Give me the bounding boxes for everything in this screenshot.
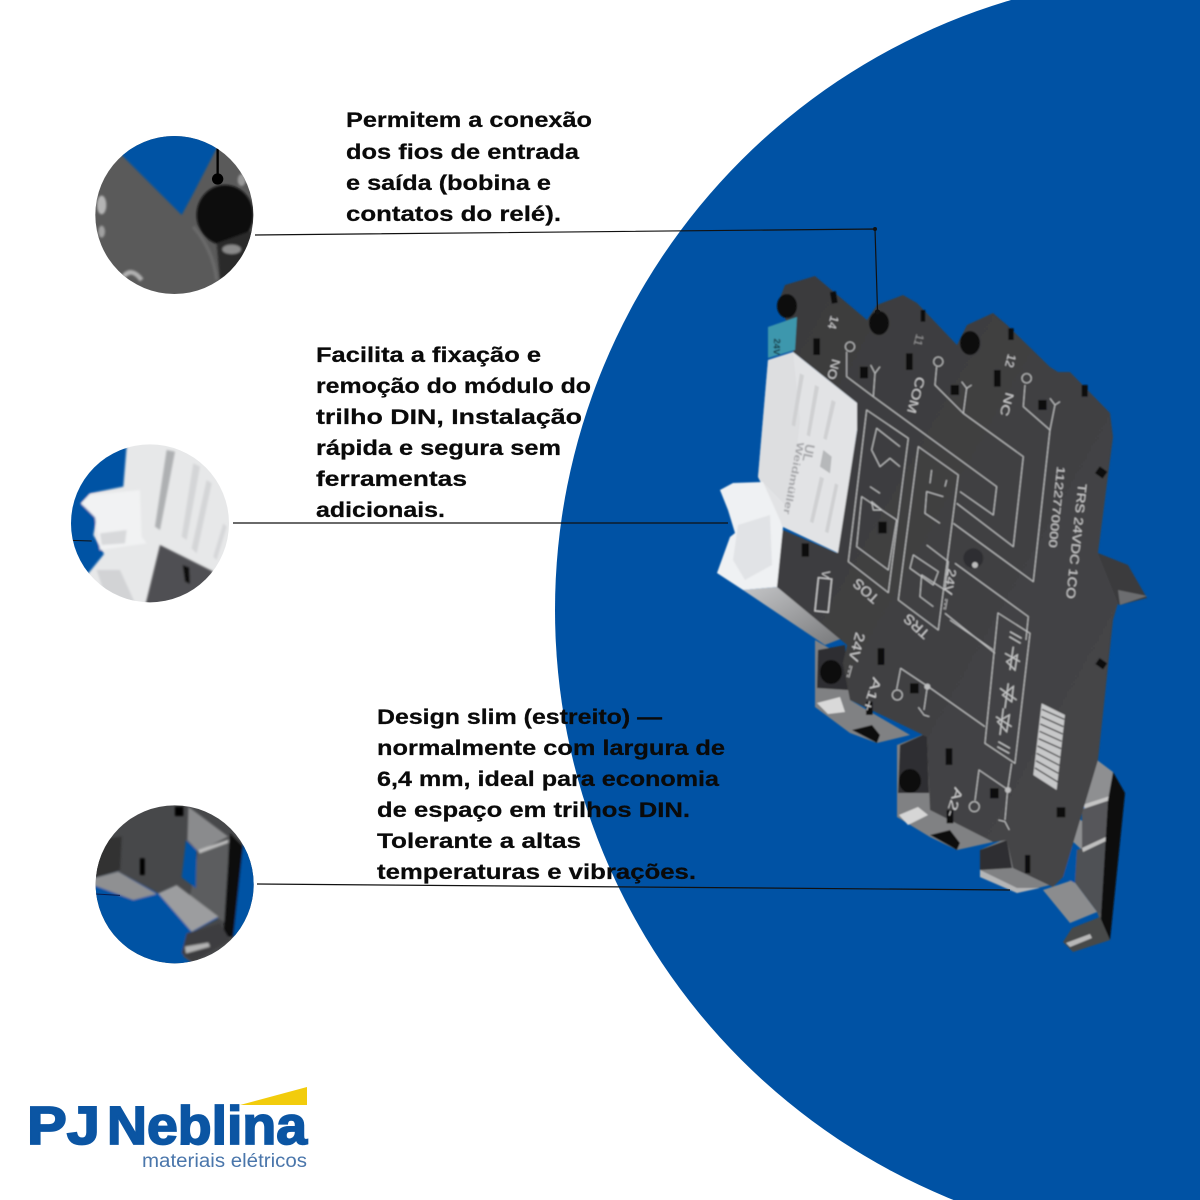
lower plate printed labels <box>841 631 965 819</box>
lower schematic lines <box>892 613 1030 830</box>
upper plate printed labels: NO <box>824 358 843 381</box>
barcode <box>1033 703 1065 790</box>
logo wordmark: Neblina <box>107 1096 308 1156</box>
lower plate printed labels: A1+ <box>860 676 884 713</box>
logo: PJ Neblina <box>27 1087 308 1172</box>
blue voltage tag <box>768 317 797 358</box>
upper plate printed labels: 12 <box>1002 353 1019 369</box>
lower mounting slots <box>866 648 1107 873</box>
text block: slim design: de espaço em trilhos DIN. <box>377 799 690 822</box>
text block: connection terminals <box>346 109 592 226</box>
upper plate printed labels: NC <box>997 391 1017 418</box>
approval mark <box>815 578 832 612</box>
text block: connection terminals: contatos do relé). <box>346 203 561 226</box>
logo yellow roof <box>240 1087 307 1105</box>
text block: DIN rail fixing: Facilita a fixação e <box>316 344 541 367</box>
text block: DIN rail fixing: adicionais. <box>316 499 445 522</box>
text block: DIN rail fixing: trilho DIN, Instalação <box>316 406 582 429</box>
upper schematic lines <box>845 342 1060 653</box>
lower plate details, drawn in zoom coordinates <box>841 613 1107 873</box>
upper plate printed labels: TRS 24VDC 1CO <box>1063 483 1089 599</box>
text block: slim design: 6,4 mm, ideal para economia <box>377 768 719 791</box>
callout line: release clip <box>233 522 728 524</box>
text block: DIN rail fixing <box>316 344 591 522</box>
lower plate printed labels: A2- <box>943 786 965 819</box>
terminal holes <box>777 294 980 355</box>
upper plate printed labels: COM <box>904 375 927 415</box>
rear clip tab <box>1098 553 1147 605</box>
text block: slim design: Tolerante a altas <box>377 830 581 853</box>
white relay cover <box>758 352 857 553</box>
text block: slim design: Design slim (estreito) — <box>377 706 662 729</box>
zoom circle: DIN foot <box>93 803 260 970</box>
lower plate printed labels: 24V ⎓ <box>841 631 869 680</box>
upper plate printed labels: TRS <box>900 611 933 642</box>
dark body plate <box>773 276 1118 887</box>
callout line: slim design foot <box>257 884 1010 890</box>
DIN rail foot clip <box>1043 745 1125 952</box>
upper plate printed labels: TOS <box>849 575 882 607</box>
text block: connection terminals: Permitem a conexão <box>346 109 592 132</box>
relay module photo <box>717 276 1147 952</box>
white release clip <box>717 482 783 590</box>
logo wordmark: PJ <box>27 1096 100 1156</box>
zoom circle: release clip <box>67 440 230 607</box>
upper plate printed labels: 24V ⎓ <box>938 568 959 612</box>
blue background circle <box>555 0 1200 1200</box>
text block: DIN rail fixing: ferramentas <box>316 468 467 491</box>
relay cover print <box>780 373 838 533</box>
text block: connection terminals: e saída (bobina e <box>346 172 551 195</box>
upper plate printed labels <box>818 314 1089 642</box>
upper plate printed labels: 1122770000 <box>1046 466 1066 548</box>
text block: DIN rail fixing: remoção do módulo do <box>316 375 591 398</box>
central rivet <box>963 548 983 568</box>
text block: slim design: temperaturas e vibrações. <box>377 861 696 884</box>
mounting slots <box>802 291 1107 663</box>
grey base strip <box>743 587 843 645</box>
zoom circle: terminal hole <box>93 130 257 297</box>
rectifier symbols <box>996 632 1022 753</box>
lower terminal blocks <box>815 640 1050 893</box>
relay cover print: Weidmüller <box>780 441 805 515</box>
upper plate details, drawn in zoom coordinates <box>771 291 1107 663</box>
text block: connection terminals: dos fios de entrada <box>346 141 579 164</box>
callout line: terminals <box>255 227 880 315</box>
upper plate printed labels: 11 <box>911 333 925 347</box>
text block: DIN rail fixing: rápida e segura sem <box>316 437 561 460</box>
upper plate printed labels: V <box>818 569 832 579</box>
logo tagline: materiais elétricos <box>142 1151 307 1172</box>
relay cover print: UL <box>799 443 818 463</box>
voltage tag print: 24V <box>771 338 782 356</box>
text block: slim design: normalmente com largura de <box>377 737 725 760</box>
nodes <box>924 684 1011 793</box>
text block: slim design <box>377 706 725 884</box>
upper plate printed labels: 14 <box>825 314 842 331</box>
